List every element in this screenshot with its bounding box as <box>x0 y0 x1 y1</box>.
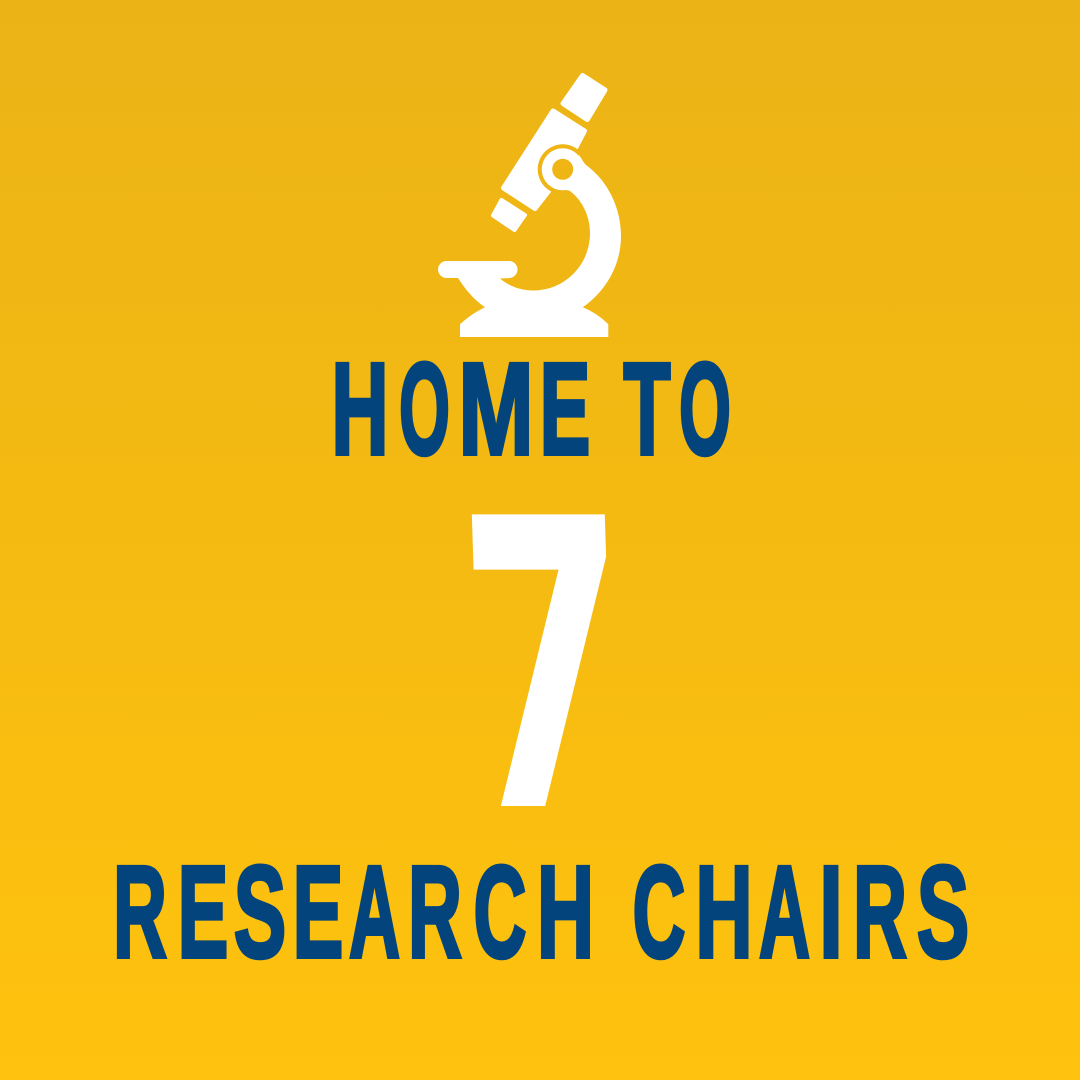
heading: research chairs: S <box>917 838 969 985</box>
heading: research chairs: A <box>759 840 810 986</box>
heading: home to: E <box>540 335 590 482</box>
heading: research chairs: E <box>293 838 343 985</box>
heading: home to: M <box>458 335 534 482</box>
heading: research chairs <box>113 838 969 986</box>
heading: research chairs: S <box>234 838 286 985</box>
icon: microscope <box>438 76 621 337</box>
heading: research chairs: H <box>537 838 594 985</box>
heading: research chairs: C <box>633 840 685 985</box>
heading: research chairs: A <box>349 840 400 986</box>
heading: research chairs: H <box>695 838 753 985</box>
heading: research chairs: R <box>853 838 907 985</box>
big number 7: 7 <box>453 435 636 900</box>
heading: home to: H <box>331 335 389 482</box>
heading: home to <box>331 335 731 483</box>
heading: home to: O <box>399 335 450 482</box>
heading: home to: O <box>679 337 731 483</box>
heading: research chairs: E <box>178 838 228 985</box>
heading: research chairs: I <box>819 840 843 985</box>
heading: home to: T <box>623 336 671 482</box>
heading: research chairs: C <box>474 840 526 985</box>
heading: research chairs: R <box>113 838 167 985</box>
heading: research chairs: R <box>408 838 462 985</box>
